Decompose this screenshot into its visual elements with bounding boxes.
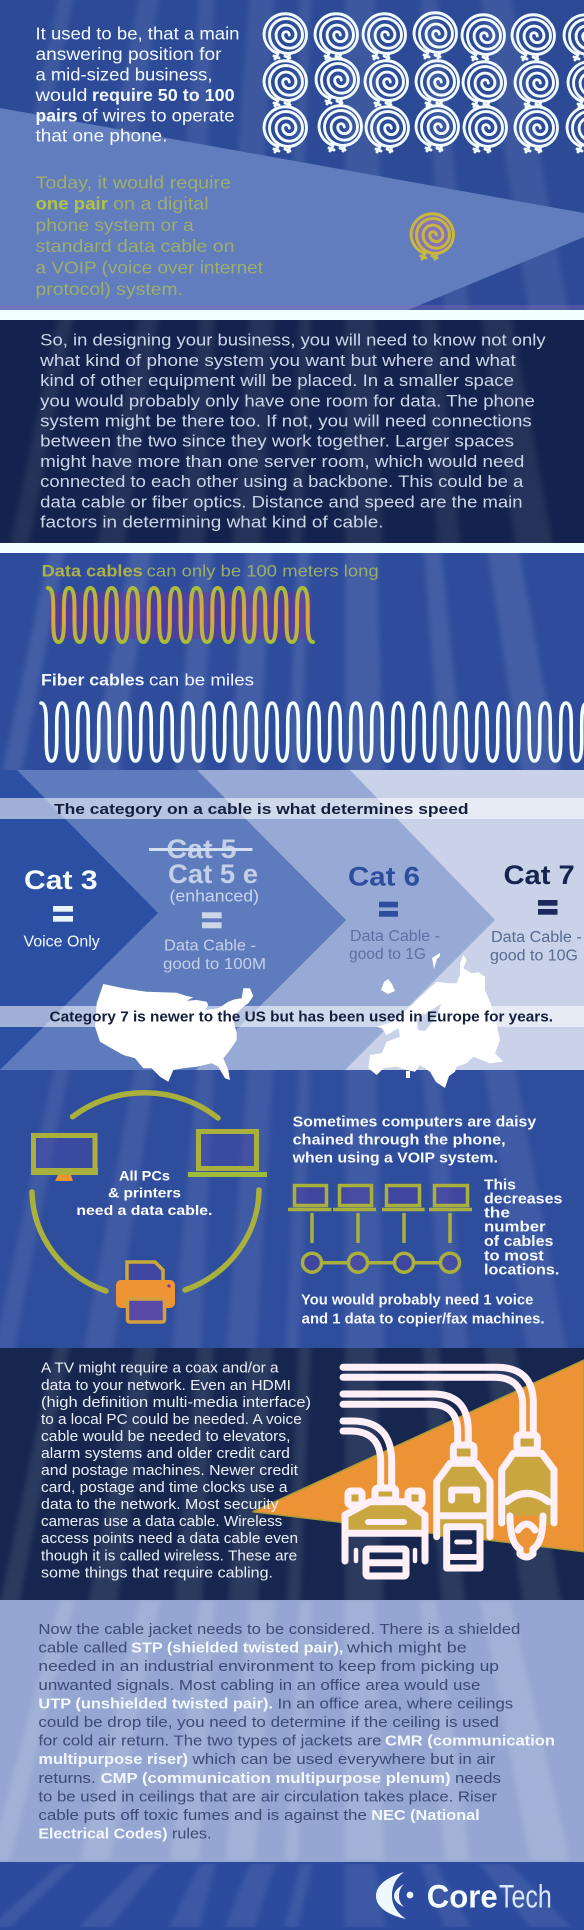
text: jacket paragraph: CMR (communication <box>385 1734 555 1750</box>
text: decreases cables: of cables <box>484 1234 553 1250</box>
column: cat 3 <box>24 865 100 951</box>
text: jacket paragraph: CMP (communication multipurpose plenum) <box>101 1771 451 1787</box>
text: daisy chain: chained through the phone, <box>293 1133 506 1149</box>
band: speed heading: The category on a cable is what determines speed <box>54 801 468 818</box>
text: coax and HDMI paragraph: (high definition multi-media interface) <box>41 1395 311 1411</box>
panel: designing your business <box>0 320 584 543</box>
text: old wiring: It used to be, that a main <box>36 24 240 44</box>
text: old wiring: answering position for <box>36 44 222 64</box>
heading: data cables: can only be 100 meters long <box>147 562 379 581</box>
text: decreases cables: locations. <box>484 1262 559 1278</box>
text: design paragraph: factors in determining what kind of cable. <box>40 512 384 532</box>
text: one pair today: Today, it would require <box>36 172 231 192</box>
text: copier and fax <box>301 1292 544 1327</box>
text: coax and HDMI paragraph: card, postage and time clocks use a <box>41 1480 288 1496</box>
column: cat 3: Voice Only <box>24 934 100 951</box>
text: coax and HDMI paragraph: data to the network. Most security <box>41 1497 279 1513</box>
text: coax and HDMI paragraph: access points need a data cable even <box>41 1531 298 1547</box>
column: cat 6: good to 1G <box>349 946 426 963</box>
column: cat 5e: Cat 5 e <box>168 859 258 889</box>
band: category 7 note text: Category 7 is newer to the US but has been used in Europe for years. <box>50 1010 553 1026</box>
text: jacket paragraph: returns. <box>38 1771 96 1787</box>
text: design paragraph: data cable or fiber optics. Distance and speed are the main <box>40 492 522 511</box>
text: decreases cables: to most <box>484 1248 544 1264</box>
column: cat 6: Cat 6 <box>348 862 420 892</box>
text: jacket paragraph: In an office area, where ceilings <box>278 1696 513 1712</box>
text: coax and HDMI paragraph: though it is called wireless. These are <box>41 1548 297 1564</box>
text: coax and HDMI paragraph: cameras use a data cable. Wireless <box>41 1514 282 1530</box>
text: coax and HDMI paragraph: to a local PC could be needed. A voice <box>41 1412 302 1428</box>
long white fiber wave <box>41 703 584 761</box>
text: jacket paragraph: UTP (unshielded twisted pair). <box>38 1696 273 1712</box>
text: jacket paragraph: needs <box>455 1771 501 1787</box>
column: cat 5e: (enhanced) <box>170 887 259 906</box>
panel: cable jackets <box>0 1600 584 1862</box>
short gold cable wave <box>48 588 313 642</box>
text: all PCs need a data cable: need a data cable. <box>76 1202 212 1218</box>
text: jacket paragraph: NEC (National <box>371 1808 480 1824</box>
panel: computers and printers <box>0 1070 568 1348</box>
panel: footer <box>0 1862 584 1930</box>
text: design paragraph <box>39 331 546 532</box>
text: jacket paragraph: STP (shielded twisted pair), <box>131 1641 343 1657</box>
column: cat 7 <box>490 860 582 965</box>
text: decreases cables: This <box>484 1177 516 1193</box>
text: old wiring: of wires to operate <box>82 106 235 126</box>
column: cat 5e: Cat 5 <box>166 834 236 864</box>
column: cat 6 <box>348 862 440 963</box>
text: coax and HDMI paragraph <box>41 1361 311 1581</box>
text: all PCs need a data cable <box>76 1168 212 1218</box>
icon: single gold wire pair <box>411 214 454 259</box>
chevron: cat 5 <box>0 770 346 1070</box>
chevron: cat 6 <box>0 770 495 1070</box>
text: one pair today: standard data cable on <box>36 236 234 256</box>
text: jacket paragraph: cable called <box>38 1641 127 1657</box>
text: jacket paragraph: Electrical Codes) <box>38 1827 168 1843</box>
text: daisy chain: when using a VOIP system. <box>292 1150 498 1166</box>
text: all PCs need a data cable: & printers <box>108 1185 181 1201</box>
text: one pair today: protocol) system. <box>36 279 183 299</box>
text: copier and fax: You would probably need 1 voice <box>301 1292 533 1308</box>
logo: CoreTech: Core <box>427 1879 498 1915</box>
text: old wiring: that one phone. <box>36 126 168 146</box>
heading: fiber cables: can be miles <box>149 671 254 690</box>
text: coax and HDMI paragraph: A TV might require a coax and/or a <box>41 1361 280 1377</box>
text: design paragraph: connected to each other using a backbone. This could be a <box>40 472 524 491</box>
text: jacket paragraph: cable puts off toxic fumes and is against the <box>38 1808 367 1824</box>
text: jacket paragraph: which might be <box>346 1641 467 1657</box>
text: coax and HDMI paragraph: cable would be needed to elevators, <box>41 1429 290 1445</box>
map: Europe <box>368 953 503 1088</box>
text: jacket paragraph: for cold air return. The two types of jackets are <box>38 1734 381 1750</box>
background wedge <box>0 108 584 310</box>
text: jacket paragraph: needed in an industrial environment to keep from picking up <box>38 1659 499 1675</box>
column: cat 3: Cat 3 <box>24 865 98 895</box>
text: all PCs need a data cable: All PCs <box>119 1168 170 1184</box>
text: design paragraph: might have more than one server room, which would need <box>40 452 524 471</box>
text: daisy chain <box>292 1115 536 1166</box>
text: one pair today: phone system or a <box>36 215 194 235</box>
column: cat 7: Data Cable - <box>491 929 582 946</box>
column: cat 5e: good to 100M <box>163 956 266 973</box>
panel: cable distance <box>2 553 584 770</box>
column: cat 6: Data Cable - <box>350 928 440 945</box>
network ring arcs <box>32 1093 259 1291</box>
text: old wiring <box>34 24 239 146</box>
text: old wiring: pairs <box>36 106 78 126</box>
icon: desktop monitor <box>31 1136 98 1181</box>
text: design paragraph: system might be there too. If not, you will need connections <box>40 412 532 430</box>
text: one pair today <box>36 172 263 299</box>
divider band one <box>0 310 584 320</box>
text: coax and HDMI paragraph: alarm systems and older credit card <box>41 1446 290 1462</box>
text: jacket paragraph: rules. <box>172 1827 212 1843</box>
icon grid: many wire pairs <box>264 13 584 152</box>
icon: laptop <box>188 1132 267 1177</box>
panel: other things that need cabling <box>0 1348 584 1600</box>
band: speed heading <box>0 798 584 819</box>
text: jacket paragraph: multipurpose riser) <box>38 1752 188 1768</box>
diagram: daisy chained laptops <box>288 1186 472 1272</box>
panel: cable categories <box>0 770 584 1088</box>
text: design paragraph: So, in designing your business, you will need to know not only <box>40 331 546 350</box>
text: coax and HDMI paragraph: and postage machines. Newer credit <box>41 1463 298 1479</box>
text: daisy chain: Sometimes computers are daisy <box>293 1115 536 1131</box>
text: design paragraph: you would probably only have one room for data. The phone <box>40 391 535 410</box>
logo: CoreTech: Tech <box>499 1879 552 1915</box>
logo: CoreTech <box>376 1872 552 1919</box>
panel: old versus new wiring <box>0 0 584 320</box>
orange wedge <box>253 1360 584 1552</box>
text: design paragraph: between the two since they work together. Larger spaces <box>40 432 514 451</box>
heading: fiber cables <box>41 671 254 690</box>
text: jacket paragraph: which can be used everywhere but in air <box>191 1752 496 1768</box>
text: decreases cables: the <box>484 1206 510 1222</box>
text: jacket paragraph: unwanted signals. Most cabling in an office area would use <box>38 1678 480 1694</box>
text: one pair today: on a digital <box>113 194 209 214</box>
text: decreases cables <box>484 1177 562 1278</box>
text: coax and HDMI paragraph: some things that require cabling. <box>41 1565 273 1581</box>
icon: three cable connectors <box>343 1367 554 1576</box>
text: decreases cables: decreases <box>484 1191 562 1207</box>
chevron: cat 3 <box>0 770 158 1070</box>
text: one pair today: one pair <box>36 194 108 214</box>
text: design paragraph: kind of other equipment will be placed. In a smaller space <box>40 371 514 390</box>
text: coax and HDMI paragraph: data to your network. Even an HDMI <box>41 1378 291 1394</box>
text: jacket paragraph: to be used in ceilings that are air circulation takes place. Riser <box>38 1789 497 1805</box>
text: copier and fax: and 1 data to copier/fax machines. <box>302 1311 544 1327</box>
text: jacket paragraph: could be drop tile, you need to determine if the ceiling is used <box>38 1715 499 1731</box>
column: cat 5e: Data Cable - <box>164 938 256 955</box>
text: decreases cables: number <box>484 1220 546 1236</box>
text: old wiring: a mid-sized business, <box>36 64 212 84</box>
text: old wiring: would <box>34 85 88 105</box>
text: design paragraph: what kind of phone system you want but where and what <box>39 351 516 370</box>
column: cat 7: Cat 7 <box>504 860 575 890</box>
divider band two <box>0 543 584 553</box>
text: old wiring: require 50 to 100 <box>92 85 235 105</box>
heading: data cables: Data cables <box>42 562 143 581</box>
column: cat 7: good to 10G <box>490 948 578 965</box>
icon: printer <box>116 1262 175 1322</box>
text: jacket paragraph <box>38 1622 555 1843</box>
heading: fiber cables: Fiber cables <box>41 671 144 690</box>
column: cat 5e <box>149 834 266 973</box>
text: jacket paragraph: Now the cable jacket needs to be considered. There is a shielded <box>38 1622 520 1638</box>
heading: data cables <box>42 562 379 581</box>
text: one pair today: a VOIP (voice over internet <box>36 258 263 278</box>
band: category 7 note background <box>0 1006 584 1027</box>
map: United States <box>95 984 253 1082</box>
